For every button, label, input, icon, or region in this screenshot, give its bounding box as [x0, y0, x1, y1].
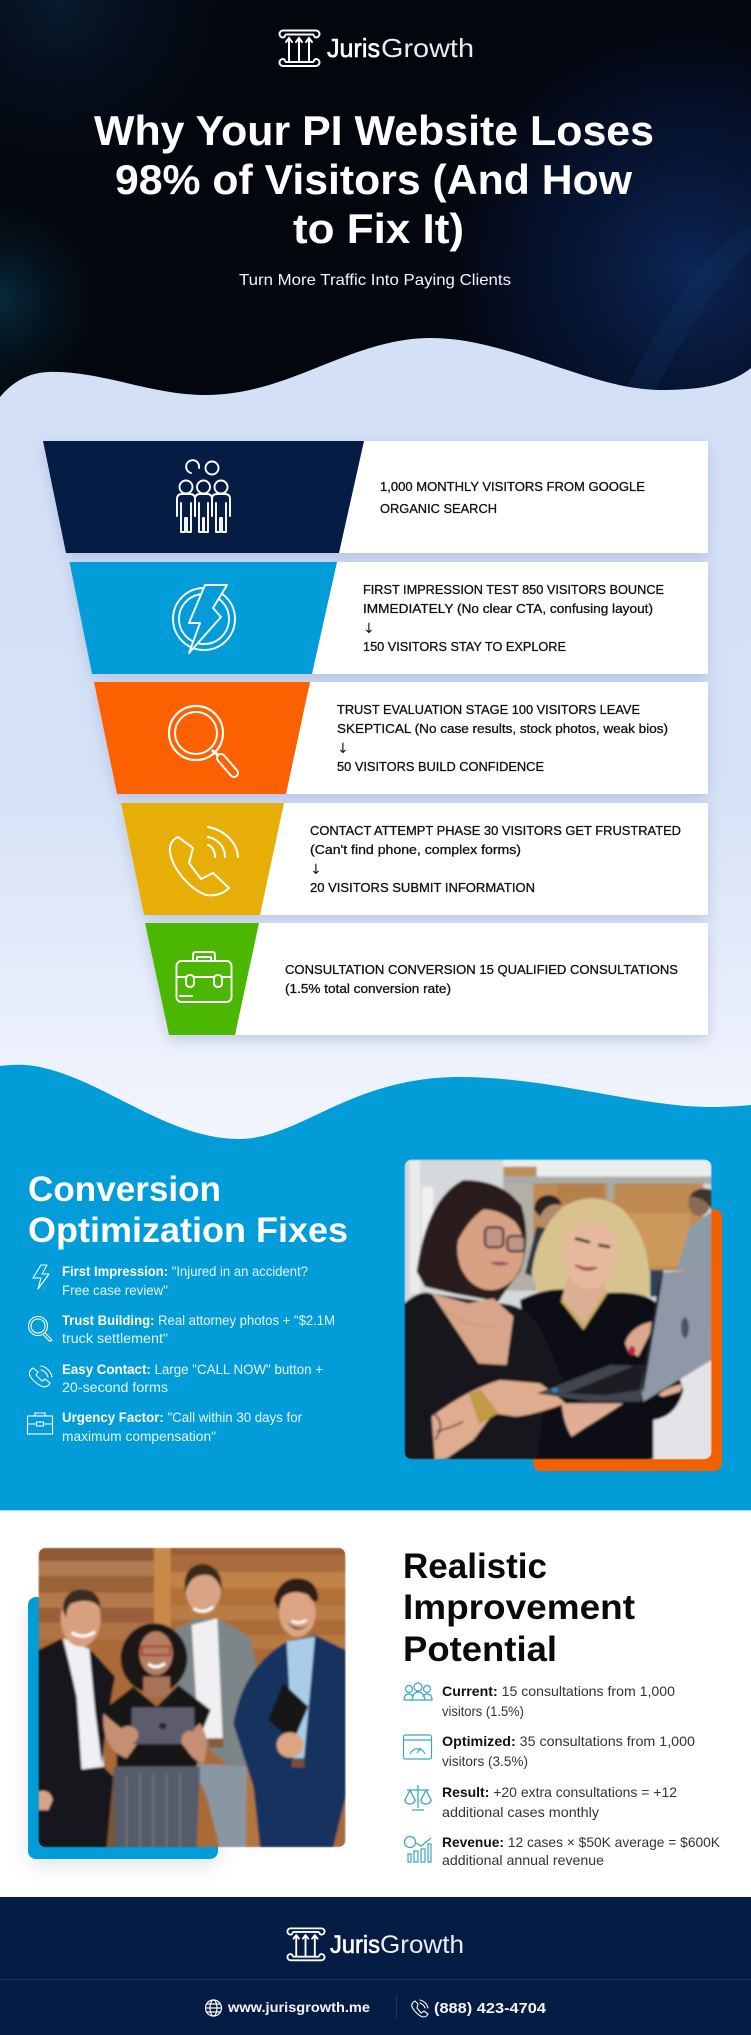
item: urgency factor: maximum compensation"	[62, 1428, 216, 1444]
text: stage 4: (Can't find phone, complex forms)	[310, 842, 521, 857]
icon: magnifying glass	[169, 706, 234, 773]
text: stage 3: TRUST EVALUATION STAGE 100 VISITORS LEAVE	[337, 702, 640, 717]
panel: funnel section background with wave	[0, 338, 751, 1160]
text: stage 4: ↓	[310, 862, 322, 878]
photo: four professionals standing against wood wall	[38, 1548, 346, 1847]
item: easy contact: Easy Contact: Large "CALL NOW" button +	[62, 1361, 323, 1377]
text: stage 5: CONSULTATION CONVERSION 15 QUALIFIED CONSULTATIONS	[285, 962, 678, 977]
item: current	[404, 1683, 675, 1719]
contact: website: www.jurisgrowth.me	[227, 1999, 370, 2015]
text: stage 2: 150 VISITORS STAY TO EXPLORE	[363, 639, 566, 654]
text: stage 2: FIRST IMPRESSION TEST 850 VISITORS BOUNCE	[363, 582, 664, 597]
item: optimized	[404, 1733, 695, 1769]
text: stage 2: ↓	[363, 621, 375, 637]
item: revenue: Revenue: 12 cases × $50K average = $600K	[442, 1834, 721, 1850]
decorative accent: orange block behind photo	[533, 1209, 722, 1471]
logo: header JurisGrowth: Juris	[327, 33, 380, 63]
item: first impression	[33, 1263, 308, 1298]
item: easy contact: 20-second forms	[62, 1379, 168, 1395]
text: stage 3: ↓	[337, 741, 349, 757]
item: trust building: Trust Building: Real attorney photos + "$2.1M	[62, 1312, 335, 1328]
heading: realistic improvement potential	[403, 1547, 635, 1669]
panel: dark header background	[0, 0, 751, 430]
text: stage 5	[285, 962, 678, 996]
heading: realistic improvement potential: Improvement	[403, 1588, 635, 1627]
panel: conversion optimization fixes	[0, 1065, 751, 1510]
heading: conversion optimization fixes: Optimization Fixes	[28, 1211, 348, 1250]
item: result: Result: +20 extra consultations = +12	[442, 1784, 677, 1800]
item: optimized: Optimized: 35 consultations from 1,000	[442, 1733, 695, 1749]
text: stage 3: 50 VISITORS BUILD CONFIDENCE	[337, 759, 544, 774]
item: optimized: visitors (3.5%)	[442, 1753, 528, 1769]
item: result: additional cases monthly	[442, 1804, 599, 1820]
icon: lightning bolt in circle	[173, 585, 235, 653]
heading: realistic improvement potential: Potential	[403, 1630, 557, 1669]
decorative accent: blue block behind photo	[28, 1597, 218, 1859]
item: trust building: truck settlement"	[62, 1330, 168, 1346]
text: stage 1	[380, 479, 645, 516]
title: Why Your PI Website Loses	[94, 107, 654, 154]
funnel row 3: trust evaluation	[94, 682, 708, 794]
item: revenue	[404, 1834, 721, 1868]
icon: column with arrows	[280, 30, 320, 66]
subtitle: Turn More Traffic Into Paying Clients	[239, 272, 511, 289]
item: urgency factor: Urgency Factor: "Call within 30 days for	[62, 1409, 302, 1425]
item: easy contact	[29, 1361, 323, 1395]
item: first impression: Free case review"	[62, 1282, 168, 1298]
text: stage 1: ORGANIC SEARCH	[380, 501, 497, 516]
funnel row 4: contact attempt	[121, 803, 708, 915]
logo: header JurisGrowth	[280, 30, 474, 66]
item: trust building	[28, 1312, 335, 1346]
text: stage 2	[363, 582, 664, 654]
icon: phone with signal	[170, 827, 238, 895]
contact: phone: (888) 423-4704	[434, 2001, 546, 2017]
panel: realistic improvement potential	[0, 1510, 751, 1897]
text: stage 4: CONTACT ATTEMPT PHASE 30 VISITORS GET FRUSTRATED	[310, 823, 681, 838]
icon: group of people	[177, 460, 230, 532]
heading: conversion optimization fixes	[28, 1170, 348, 1250]
title: 98% of Visitors (And How	[115, 156, 632, 203]
text: stage 5: (1.5% total conversion rate)	[285, 981, 451, 996]
logo: footer JurisGrowth: Growth	[380, 1931, 464, 1959]
logo: footer JurisGrowth	[287, 1928, 464, 1960]
funnel row 2: first impression	[70, 562, 708, 674]
funnel row 5: consultation conversion	[145, 923, 708, 1035]
heading: conversion optimization fixes: Conversion	[28, 1170, 221, 1209]
text: stage 2: IMMEDIATELY (No clear CTA, confusing layout)	[363, 601, 653, 616]
text: stage 1: 1,000 MONTHLY VISITORS FROM GOOGLE	[380, 479, 645, 494]
contact: phone	[412, 2000, 546, 2017]
item: current: Current: 15 consultations from 1,000	[442, 1683, 675, 1699]
title	[94, 107, 654, 252]
item: current: visitors (1.5%)	[442, 1703, 524, 1719]
item: urgency factor	[28, 1409, 302, 1444]
text: stage 4	[310, 823, 681, 895]
item: first impression: First Impression: "Injured in an accident?	[62, 1263, 308, 1279]
photo: two women looking at a laptop	[404, 1159, 712, 1460]
footer	[0, 1897, 751, 2035]
logo: header JurisGrowth: Growth	[381, 33, 474, 63]
text: stage 3: SKEPTICAL (No case results, stock photos, weak bios)	[337, 721, 668, 736]
title: to Fix It)	[293, 205, 464, 252]
icon: briefcase	[176, 952, 232, 1002]
item: result	[405, 1784, 677, 1820]
heading: realistic improvement potential: Realistic	[403, 1547, 547, 1586]
funnel row 1: monthly visitors	[43, 441, 708, 553]
text: stage 3	[337, 702, 668, 774]
logo: footer JurisGrowth: Juris	[330, 1931, 380, 1959]
chart: conversion funnel	[43, 441, 708, 1035]
text: stage 4: 20 VISITORS SUBMIT INFORMATION	[310, 880, 535, 895]
item: revenue: additional annual revenue	[442, 1852, 604, 1868]
